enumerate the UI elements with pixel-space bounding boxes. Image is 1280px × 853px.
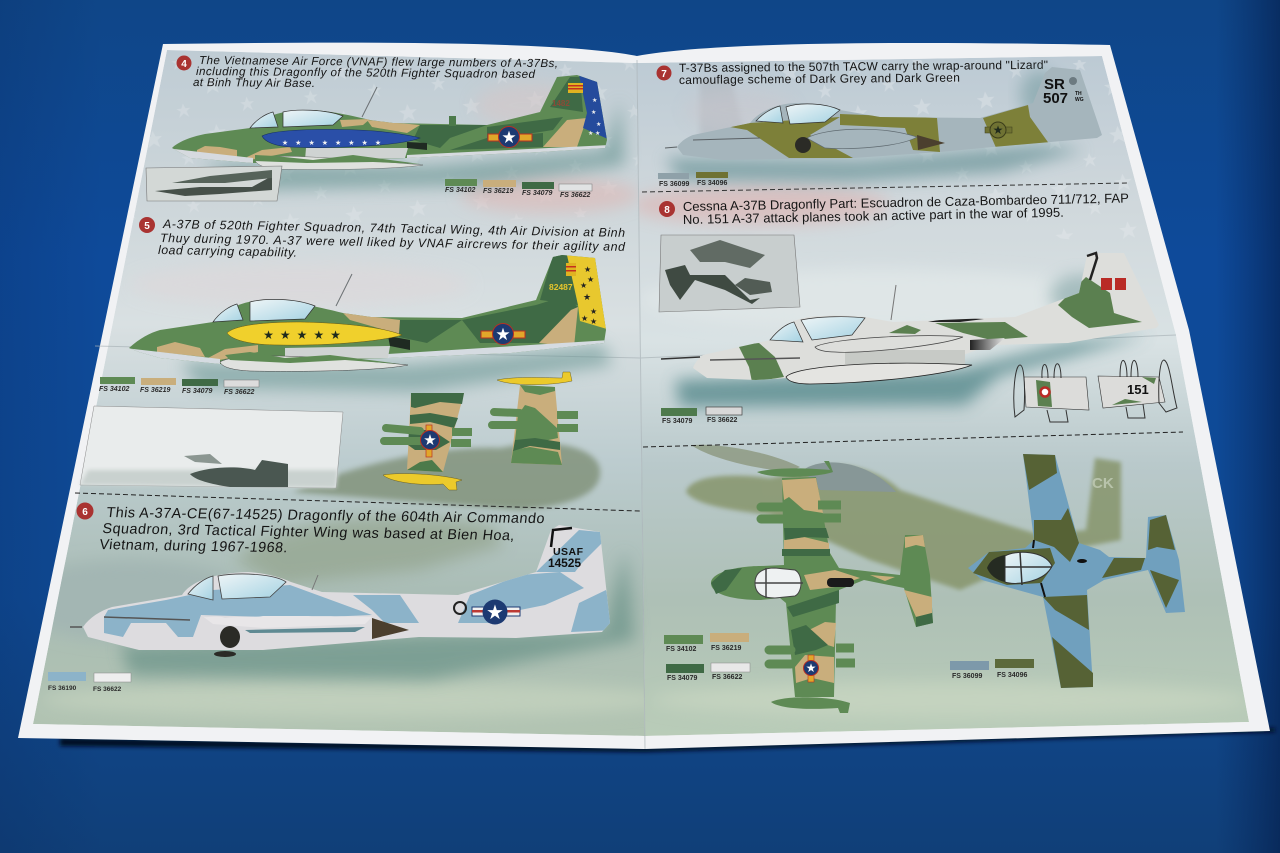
caption 4: The Vietnamese Air Force (VNAF) flew large numbers of A-37Bs, [199, 54, 558, 70]
swatches: plan view green: FS 34102 [666, 646, 696, 653]
swatches: aircraft 7: FS 34096 [697, 180, 727, 187]
caption 7: 7 [661, 69, 667, 80]
swatches: plan view blue: FS 36099 [952, 673, 982, 680]
swatches: plan view green: FS 36622 [712, 674, 742, 681]
caption 8: No. 151 A-37 attack planes took an active part in the war of 1995. [683, 205, 1064, 227]
stars on tip tank: ★★★★★★★★ [282, 139, 388, 147]
caption 5: Thuy during 1970. A-37 were well liked by VNAF aircrews for their agility and [160, 231, 626, 254]
tail flag: ★ ★ [588, 130, 600, 137]
panel: right page artwork: CK [1092, 475, 1114, 492]
roundel: ★ [806, 661, 816, 675]
caption 6: This A-37A-CE(67-14525) Dragonfly of the 604th Air Commando [106, 505, 545, 527]
caption 5: A-37B of 520th Fighter Squadron, 74th Tactical Wing, 4th Air Division at Binh [162, 217, 625, 240]
tail flag: ★ [596, 121, 601, 128]
tail markings [549, 263, 597, 326]
caption 6 [76, 502, 545, 556]
tail flag: ★ [591, 109, 596, 116]
aircraft 7 group: Lizard camouflage: WG [1075, 97, 1084, 103]
aircraft 6 group: A-37A light camouflage [70, 520, 635, 680]
divider [75, 493, 640, 511]
caption 6: 6 [82, 507, 88, 518]
swatches: aircraft 4: FS 36219 [483, 188, 513, 195]
tail flag [1101, 278, 1126, 290]
aircraft 8 group: Peruvian A-37B [661, 245, 1165, 407]
swatches: aircraft 7: FS 36099 [659, 181, 689, 188]
plan view: green and tan A-37 top [711, 461, 933, 713]
swatches: aircraft 6: FS 36622 [93, 686, 122, 693]
caption 4 [176, 54, 558, 90]
roundel [985, 122, 1012, 138]
roundel [481, 324, 525, 344]
panel: left page artwork [10, 50, 680, 736]
aircraft 7 group: Lizard camouflage: TH [1075, 91, 1082, 97]
caption 4: including this Dragonfly of the 520th Fighter Squadron based [196, 65, 536, 81]
fold lines [95, 60, 1176, 749]
tail flag [552, 83, 601, 137]
roundel: ★ [993, 123, 1003, 137]
tail markings: ★ [590, 317, 597, 326]
wing plan view: top left [383, 393, 472, 490]
caption 8: 8 [664, 205, 670, 216]
aircraft 5 group: yellow tip tanks [125, 250, 615, 392]
swatches: plan view blue: FS 34096 [997, 672, 1027, 679]
wing plan view: top left: ★ [423, 432, 437, 449]
swatches: aircraft 5: FS 34102 [99, 386, 129, 393]
swatches: aircraft 5: FS 34079 [182, 388, 212, 395]
caption 5: load carrying capability. [158, 243, 297, 260]
stars on yellow tank: ★★★★★ [263, 328, 347, 342]
paper shadow [60, 728, 1275, 752]
swatches: aircraft 8 [661, 407, 742, 425]
roundel: ★ [486, 602, 504, 624]
swatches: aircraft 6 [48, 672, 131, 693]
roundel [488, 126, 532, 148]
tail markings: ★ [584, 265, 591, 274]
swatches: plan view green [664, 633, 750, 682]
caption 5: 5 [144, 221, 150, 232]
swatches: plan view blue [950, 659, 1034, 680]
aircraft 4 group: VNAF A-37B [165, 70, 625, 190]
roundel: ★ [501, 128, 517, 147]
swatches: aircraft 4: FS 34102 [445, 187, 475, 194]
photo: aircraft on a light background [80, 406, 343, 488]
tail details: aircraft 8 [1014, 360, 1177, 422]
aircraft 6 group: A-37A light camouflage: 14525 [548, 556, 581, 570]
swatches: aircraft 7 [658, 172, 728, 188]
roundel [472, 600, 520, 624]
caption 4: 4 [181, 59, 187, 70]
divider [643, 432, 1183, 447]
wing plan view: top right [492, 372, 578, 465]
swatches: aircraft 4 [445, 179, 592, 199]
swatches: aircraft 4: FS 36622 [560, 192, 590, 199]
tail markings: ★ [587, 275, 594, 284]
photo: A-37 in flight [146, 166, 282, 201]
swatches: aircraft 5: FS 36622 [224, 389, 254, 396]
aircraft 7 group: Lizard camouflage: SR [1044, 76, 1065, 93]
caption 8 [659, 190, 1129, 227]
caption 5 [139, 217, 626, 260]
tail markings: ★ [581, 314, 588, 323]
plan view: blue-grey and green T-37 [968, 454, 1185, 688]
photo: aircraft with stores [659, 235, 800, 312]
tail flag: 1482 [552, 99, 570, 108]
caption 8: Cessna A-37B Dragonfly Part: Escuadron de Caza-Bombardeo 711/712, FAP [683, 190, 1129, 214]
caption 7 [656, 58, 1048, 87]
panel: right page artwork [630, 56, 1250, 736]
swatches: aircraft 5: FS 36219 [140, 387, 170, 394]
swatches: plan view green: FS 34079 [667, 675, 697, 682]
tail markings: ★ [580, 281, 587, 290]
aircraft 6 group: A-37A light camouflage: USAF [553, 546, 584, 558]
caption 7: T-37Bs assigned to the 507th TACW carry the wrap-around "Lizard" [679, 58, 1048, 75]
aircraft 7 group: Lizard camouflage [665, 60, 1110, 182]
caption 4: at Binh Thuy Air Base. [193, 76, 315, 90]
caption 6: Vietnam, during 1967-1968. [99, 537, 288, 556]
tail flag: ★ [592, 97, 597, 104]
swatches: aircraft 8: FS 36622 [707, 417, 737, 424]
caption 7: camouflage scheme of Dark Grey and Dark Green [679, 71, 960, 87]
swatches: aircraft 8: FS 34079 [662, 418, 692, 425]
swatches: aircraft 4: FS 34079 [522, 190, 552, 197]
swatches: aircraft 6: FS 36190 [48, 685, 77, 692]
tail markings: ★ [590, 307, 597, 316]
swatches: aircraft 5 [99, 377, 259, 396]
tail details: aircraft 8: 151 [1127, 382, 1149, 397]
roundel [804, 655, 818, 682]
divider [642, 183, 1127, 192]
caption 6: Squadron, 3rd Tactical Fighter Wing was based at Bien Hoa, [102, 521, 515, 544]
aircraft 7 group: Lizard camouflage: 507 [1043, 90, 1068, 107]
tail markings: 82487 [549, 282, 573, 292]
swatches: plan view green: FS 36219 [711, 645, 741, 652]
roundel: ★ [495, 325, 511, 344]
tail markings: ★ [583, 292, 591, 302]
